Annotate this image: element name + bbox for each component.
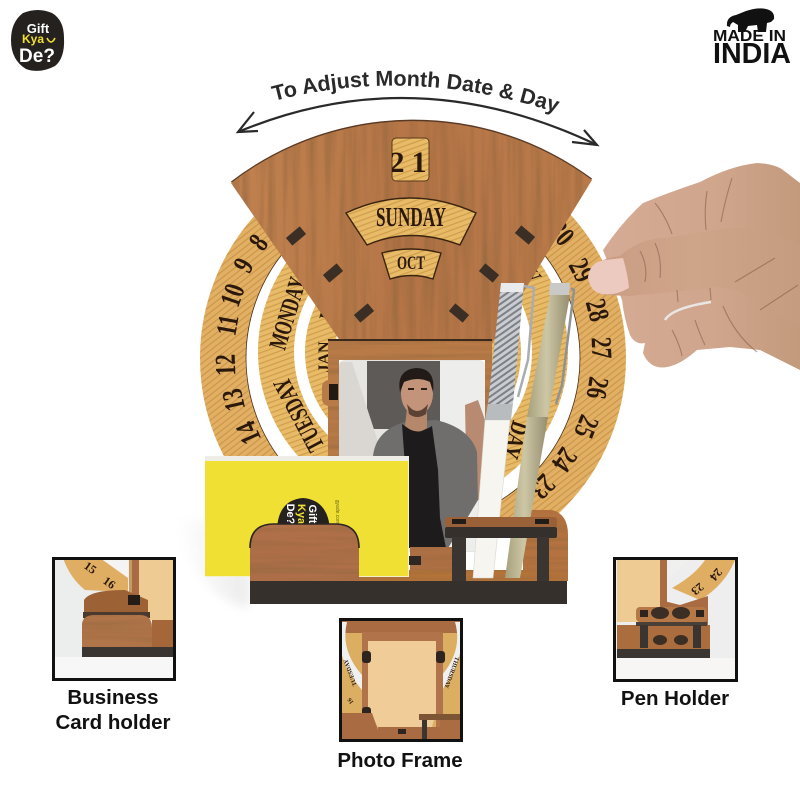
logo: Gift Kya De: Kya [22, 32, 44, 46]
label: business card holder [55, 686, 171, 734]
outer date ring: 27 [585, 336, 619, 360]
outer date ring: 28 [579, 295, 616, 325]
label: photo frame: Photo Frame [337, 749, 463, 772]
hand [588, 163, 800, 370]
weekday window: SUNDAY [376, 202, 446, 232]
label: business card holder: Business [67, 686, 159, 709]
outer date ring: 14 [229, 416, 268, 449]
month ring: D [315, 303, 340, 323]
made in India badge: MADE IN [713, 28, 786, 45]
outer date ring: 25 [567, 411, 606, 443]
outer date ring: 24 [545, 442, 584, 478]
pens [473, 283, 574, 578]
day ring: AY [510, 255, 546, 291]
ring [665, 302, 711, 320]
dark base [250, 581, 567, 604]
day ring: DAY [496, 418, 533, 462]
day ring [258, 262, 568, 478]
photo frame [322, 339, 492, 552]
shirt [402, 424, 446, 548]
outer date ring [200, 214, 626, 517]
card logo [277, 498, 330, 530]
day ring: MONDAY [265, 274, 312, 353]
outer date ring: 12 [209, 354, 242, 376]
date window: 1 [412, 146, 426, 179]
frame side tab [322, 380, 344, 406]
neck [405, 408, 427, 432]
photo of man [339, 360, 485, 552]
label: pen holder: Pen Holder [621, 687, 729, 710]
inset: business card holder [54, 558, 174, 680]
inset: pen holder: 24 [707, 565, 725, 584]
logo: Gift Kya De: Gift [27, 21, 50, 36]
inset: business card holder: 15 [81, 559, 99, 577]
made in India badge [713, 8, 791, 70]
rear base wood and floor [359, 510, 568, 581]
double headed curved arrow [238, 98, 597, 145]
jacket [373, 420, 478, 548]
month ring: JAN [316, 341, 333, 373]
date window [390, 138, 429, 181]
outer date ring: 10 [213, 280, 251, 311]
inset: photo frame [340, 620, 462, 740]
inset: photo frame: TUESDAY [343, 657, 359, 687]
outer date ring: 9 [226, 252, 260, 278]
label: business card holder: Card holder [55, 711, 171, 734]
business card [205, 456, 409, 577]
weekday window [346, 198, 476, 245]
card logo: Gift [306, 505, 318, 524]
logo: Gift Kya De [11, 10, 64, 71]
outer date ring: 30 [542, 214, 581, 252]
curved adjust label: To Adjust Month Date & Day [270, 70, 560, 114]
date window: 2 [390, 146, 404, 179]
white pen [473, 283, 534, 578]
inset: pen holder: 23 [688, 580, 707, 598]
gold pen [505, 283, 574, 578]
calendar wheels [200, 214, 626, 517]
card logo: Kya [295, 504, 307, 525]
inset: pen holder [614, 558, 736, 680]
thumbnail [588, 258, 629, 294]
outer date ring: 13 [215, 386, 252, 414]
icon: lion [727, 8, 774, 32]
logo: Gift Kya De: De? [19, 46, 55, 67]
outer date ring: 26 [580, 375, 616, 401]
month window: OCT [397, 253, 425, 274]
pen holder [445, 517, 557, 581]
inset: photo frame: 16 [347, 696, 355, 705]
made in India badge: INDIA [713, 38, 791, 70]
outer date ring: 23 [523, 467, 562, 506]
card logo: De? [284, 504, 296, 525]
fan shaped wooden face [231, 120, 592, 345]
day ring: TUESDAY [269, 373, 330, 456]
business card: gyade.com [334, 500, 340, 524]
outer date ring: 11 [209, 312, 245, 338]
face [401, 379, 433, 412]
card holder front [250, 524, 359, 581]
hair [399, 368, 433, 392]
outer date ring: 8 [242, 228, 275, 256]
inset: photo frame: THURSDAY [442, 656, 459, 690]
outer date ring: 29 [562, 253, 601, 287]
soft table shadow [175, 520, 250, 606]
month window [382, 249, 441, 279]
month ring [305, 305, 521, 418]
inset: business card holder: 16 [100, 574, 118, 592]
locking tabs [286, 225, 535, 323]
